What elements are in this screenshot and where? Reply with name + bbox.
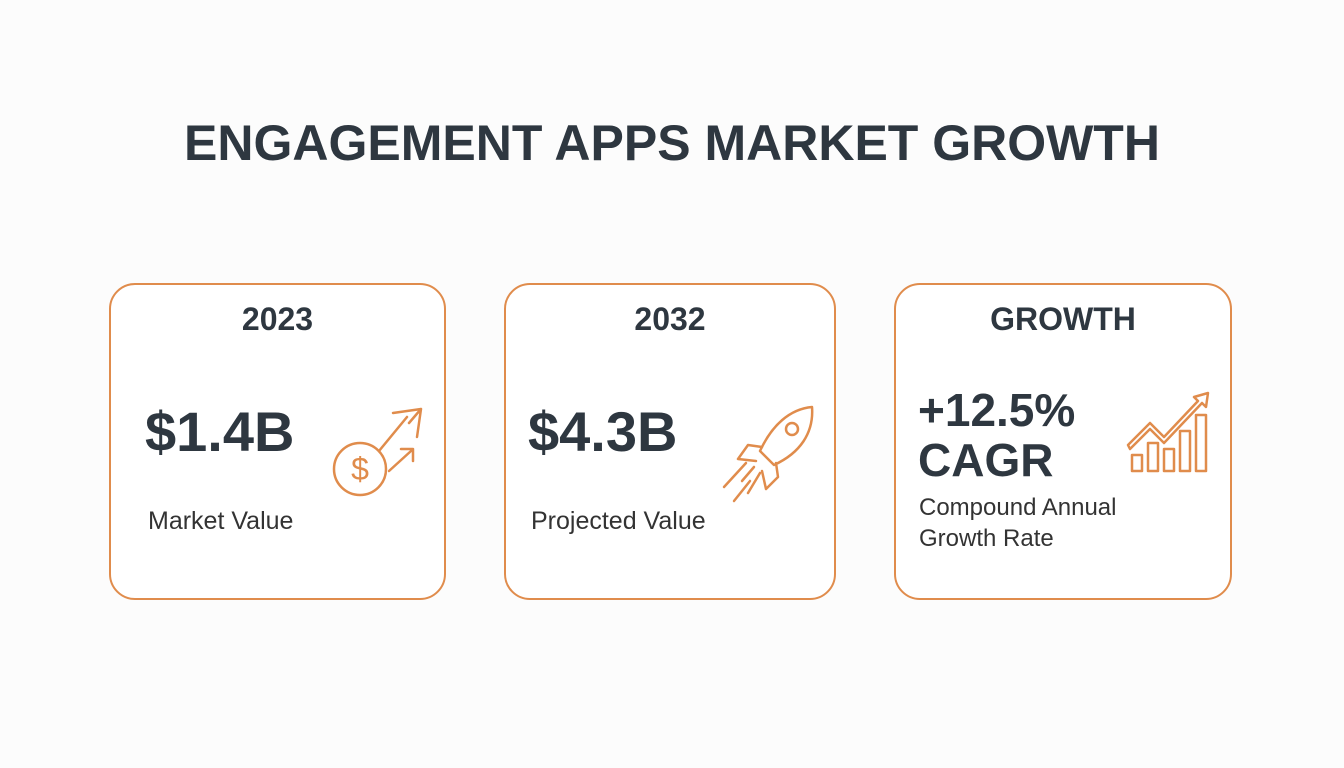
icon: growth chart — [1126, 392, 1210, 472]
heading: growth: GROWTH — [990, 301, 1136, 337]
icon: dollar arrow — [332, 408, 422, 496]
value: +12.5% CAGR: +12.5% — [918, 384, 1075, 436]
panel: 2032 — [504, 283, 836, 600]
value: $1.4B: $1.4B — [145, 400, 294, 463]
label: market value: Market Value — [148, 507, 293, 535]
value: +12.5% CAGR — [918, 384, 1075, 486]
label: compound annual growth rate: Growth Rate — [919, 525, 1054, 552]
label: projected value: Projected Value — [531, 507, 706, 535]
icon: rocket — [722, 406, 814, 502]
value: +12.5% CAGR: CAGR — [918, 434, 1053, 486]
title: ENGAGEMENT APPS MARKET GROWTH — [184, 115, 1160, 171]
value: $4.3B: $4.3B — [528, 400, 677, 463]
panel: 2023 — [109, 283, 446, 600]
heading: 2032: 2032 — [634, 301, 706, 337]
icon: dollar arrow: $ — [351, 451, 369, 487]
label: compound annual growth rate: Compound Annual — [919, 494, 1116, 521]
heading: 2023: 2023 — [242, 301, 313, 337]
panel: growth — [894, 283, 1232, 600]
label: compound annual growth rate — [919, 494, 1116, 552]
